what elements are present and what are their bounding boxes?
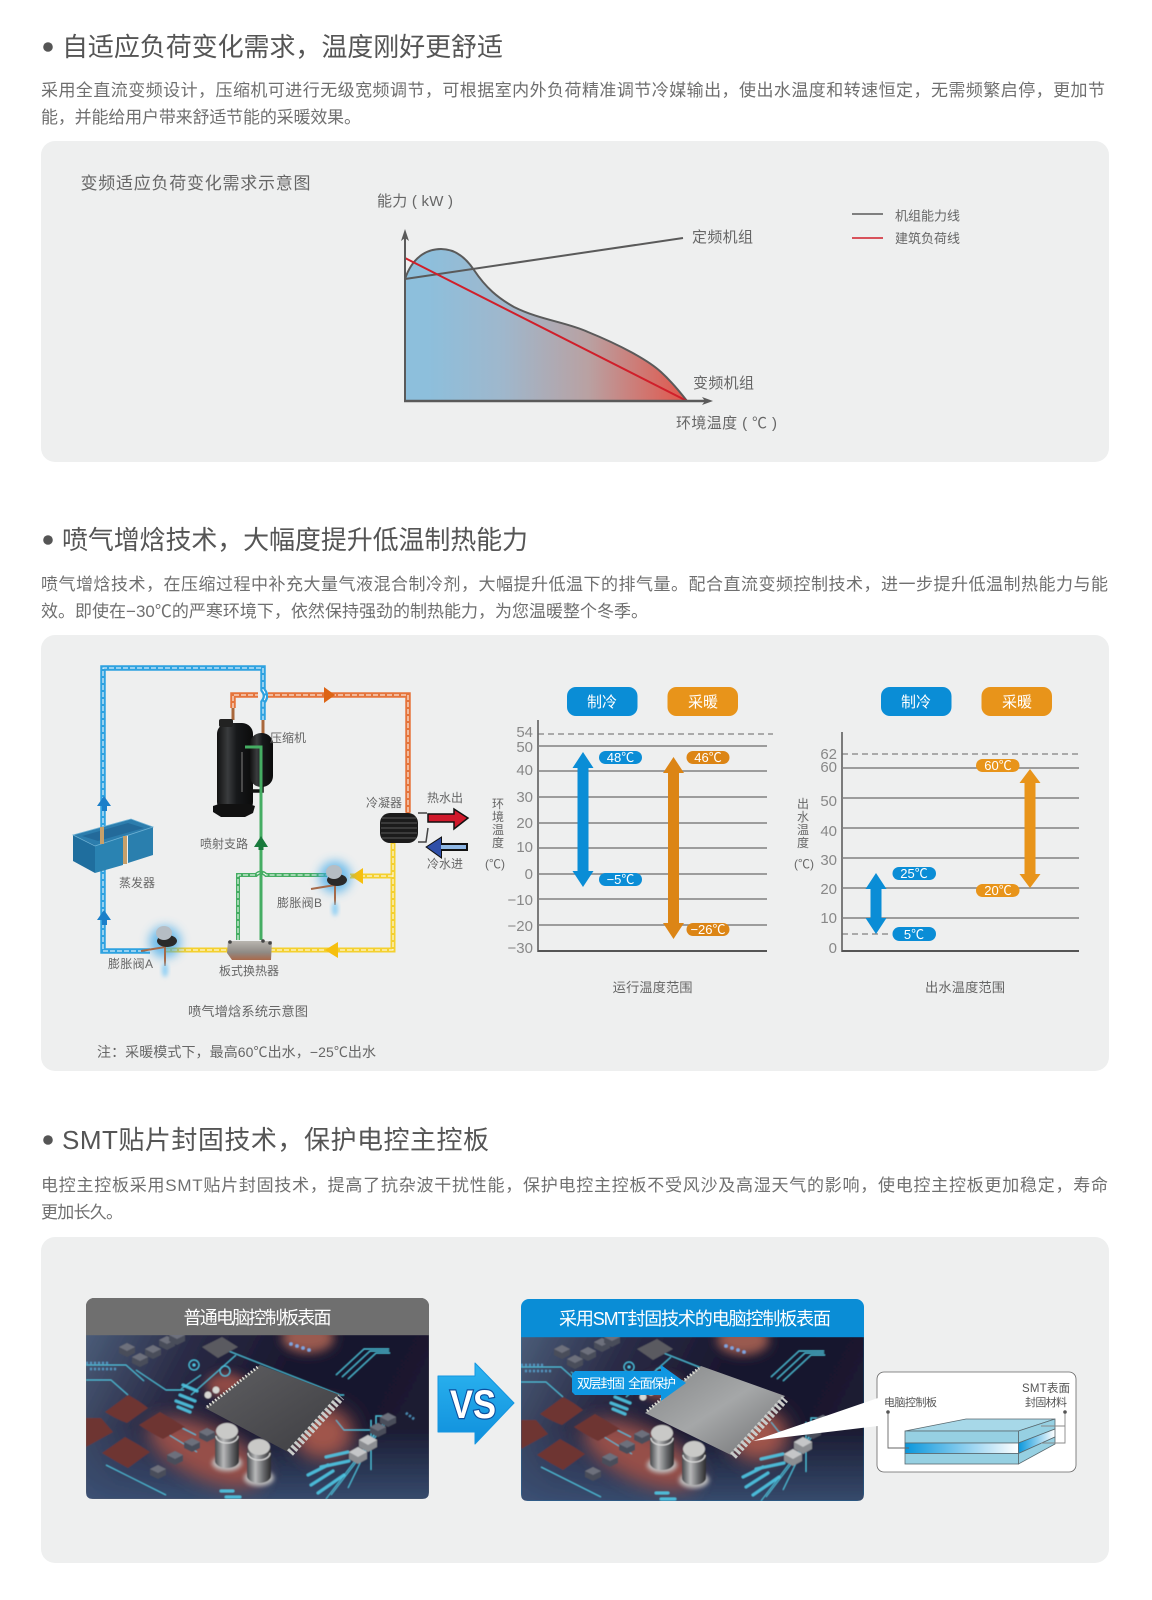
button: cooling: 制冷 (901, 694, 931, 711)
label: SMT material (1022, 1381, 1070, 1409)
arrow: cooling range (572, 752, 594, 887)
orange pipe (233, 687, 408, 812)
heading 2: 喷气增焓技术，大幅度提升低温制热能力 (62, 525, 528, 555)
icon: condenser coil (380, 812, 428, 843)
heading 3: SMT贴片封固技术，保护电控主控板 (62, 1125, 489, 1155)
component labels: 压缩机 (270, 730, 306, 745)
label: inverter unit: 变频机组 (693, 375, 754, 392)
bullet (43, 1135, 53, 1145)
chart: operating temperature range (485, 687, 773, 995)
section 2 (41, 525, 1108, 621)
y axis title: 出 (797, 797, 809, 811)
y axis title: 度 (797, 835, 809, 850)
label: control board: 电脑控制板 (884, 1395, 937, 1409)
legend: 机组能力线 (895, 208, 960, 224)
intro text 2 (41, 575, 1108, 621)
y axis title: (℃) (485, 857, 505, 871)
pill: 46 (686, 750, 730, 765)
caption: 出水温度范围 (925, 980, 1005, 995)
arrow: cold water in (427, 838, 467, 857)
chart: outlet water temperature range (794, 687, 1079, 995)
arrow: heating range (1020, 769, 1040, 888)
axis numbers: 30 (516, 789, 533, 806)
axis numbers: 0 (525, 866, 533, 883)
y axis title: 度 (492, 835, 504, 850)
axis numbers: 62 (820, 746, 837, 763)
button: heating: 采暖 (1002, 694, 1032, 711)
component labels: 喷射支路 (200, 836, 248, 851)
tag arrow (572, 1365, 686, 1401)
pill: 48 (599, 750, 642, 765)
axis and grid (538, 720, 773, 952)
card title: 普通电脑控制板表面 (184, 1308, 332, 1328)
axis numbers: 50 (516, 739, 533, 756)
bullet (43, 42, 53, 52)
panel: SMT comparison (41, 1237, 1109, 1563)
intro text 3: 更加长久。 (41, 1203, 123, 1222)
axis numbers (508, 724, 533, 957)
diagram caption: 喷气增焓系统示意图 (188, 1003, 308, 1019)
intro text 3: 电控主控板采用SMT贴片封固技术，提高了抗杂波干扰性能，保护电控主控板不受风沙及高湿天气的影响，使电控主控板更加稳定，寿命 (41, 1175, 1108, 1195)
y axis label: 能力 ( kW ) (377, 193, 453, 210)
pill: -26: −26℃ (690, 922, 726, 937)
tag arrow: 双层封固 全面保护 (577, 1376, 676, 1391)
bullet (43, 535, 53, 545)
button: heating: 采暖 (688, 694, 718, 711)
axis numbers: 30 (820, 852, 837, 869)
component labels: 蒸发器 (119, 875, 155, 890)
pill: 48: 48℃ (607, 750, 634, 765)
y axis title (485, 797, 505, 871)
y axis title: 境 (492, 809, 504, 824)
intro text 2: 效。即使在−30℃的严寒环境下，依然保持强劲的制热能力，为您温暖整个冬季。 (41, 601, 648, 621)
pill: 20 (976, 883, 1020, 898)
icon: VS arrow (438, 1363, 514, 1444)
legend: 建筑负荷线 (895, 231, 960, 246)
pill: 60: 60℃ (984, 758, 1012, 773)
pill: -5 (599, 872, 642, 887)
y axis title: 温 (492, 823, 504, 837)
arrow: heating range (663, 757, 684, 939)
footnote: 注：采暖模式下，最高60℃出水，−25℃出水 (97, 1044, 376, 1060)
axis numbers: −20 (508, 918, 533, 935)
button: cooling (881, 687, 952, 716)
axis numbers: 0 (829, 940, 837, 957)
photo card: SMT board (521, 1299, 864, 1505)
component labels (108, 730, 463, 978)
button: heating (668, 687, 738, 716)
pill: 46: 46℃ (694, 750, 722, 765)
arrow: hot water out (428, 809, 468, 829)
pill: 60 (976, 758, 1020, 773)
intro text 1: 能，并能给用户带来舒适节能的采暖效果。 (41, 108, 361, 127)
section 3 (41, 1125, 1108, 1222)
axis numbers: 20 (516, 815, 533, 832)
arrow: cooling range (866, 873, 886, 934)
icon: compressor (213, 708, 273, 817)
axis and grid (842, 732, 1079, 952)
axis numbers: −10 (508, 892, 533, 909)
y axis title: (℃) (794, 857, 814, 871)
photo card: ordinary board (86, 1298, 429, 1503)
y axis title: 水 (797, 810, 809, 824)
layered block (886, 1410, 1067, 1464)
chart title: 变频适应负荷变化需求示意图 (80, 174, 310, 193)
section 1 (41, 32, 1105, 127)
blue pipe (97, 668, 266, 951)
axis numbers: 10 (820, 910, 837, 927)
icon: plate heat exchanger (227, 939, 272, 960)
pill: 5 (892, 927, 936, 942)
heading 1: 自适应负荷变化需求，温度刚好更舒适 (62, 32, 503, 62)
intro text 3 (41, 1175, 1108, 1222)
component labels: 膨胀阀B (277, 896, 322, 910)
area chart (401, 229, 713, 405)
icon: expansion valve A (141, 926, 181, 977)
y axis title: 温 (797, 823, 809, 837)
axis numbers: 54 (516, 724, 533, 741)
card title: 采用SMT封固技术的电脑控制板表面 (559, 1309, 831, 1329)
legend (852, 208, 960, 246)
axis numbers: 50 (820, 793, 837, 810)
green pipe (238, 747, 327, 940)
component labels: 冷凝器 (366, 795, 402, 810)
label: SMT material: 封固材料 (1025, 1395, 1067, 1409)
axis numbers: 40 (516, 762, 533, 779)
label: fixed speed unit: 定频机组 (692, 229, 753, 246)
pill: 5: 5℃ (904, 927, 924, 942)
intro text 1: 采用全直流变频设计，压缩机可进行无级宽频调节，可根据室内外负荷精准调节冷媒输出，使出水温度和转速恒定，无需频繁启停，更加节 (41, 80, 1105, 100)
icon: VS arrow: VS (450, 1383, 496, 1427)
system diagram (73, 668, 468, 1019)
panel: load chart (41, 141, 1109, 462)
pill: 25 (892, 866, 936, 881)
intro text 2: 喷气增焓技术，在压缩过程中补充大量气液混合制冷剂，大幅提升低温下的排气量。配合直流变频控制技术，进一步提升低温制热能力与能 (41, 575, 1108, 594)
x axis label: 环境温度 ( ℃ ) (676, 414, 777, 432)
axis numbers: 20 (820, 881, 837, 898)
pill: 20: 20℃ (984, 883, 1012, 898)
pill: 25: 25℃ (900, 866, 928, 881)
callout: layer detail (753, 1372, 1076, 1472)
yellow pipe (165, 843, 393, 958)
axis numbers: 40 (820, 823, 837, 840)
component labels: 板式换热器 (219, 964, 279, 978)
y axis title: 环 (492, 797, 504, 811)
caption: 运行温度范围 (613, 980, 693, 995)
intro text 1 (41, 80, 1105, 127)
y axis title (794, 797, 814, 871)
button: cooling: 制冷 (587, 694, 617, 711)
pill: -5: −5℃ (607, 872, 634, 887)
icon: evaporator (73, 819, 153, 873)
axis numbers: 60 (820, 759, 837, 776)
panel: enhanced vapor injection (41, 635, 1109, 1071)
component labels: 膨胀阀A (108, 957, 153, 971)
button: cooling (567, 687, 638, 716)
axis numbers: −30 (508, 940, 533, 957)
axis numbers (820, 746, 837, 957)
icon: expansion valve B (311, 861, 351, 916)
button: heating (982, 687, 1052, 716)
axis numbers: 10 (516, 839, 533, 856)
component labels: 冷水进 (427, 857, 463, 871)
label: SMT material: SMT表面 (1022, 1381, 1070, 1395)
component labels: 热水出 (427, 791, 463, 805)
